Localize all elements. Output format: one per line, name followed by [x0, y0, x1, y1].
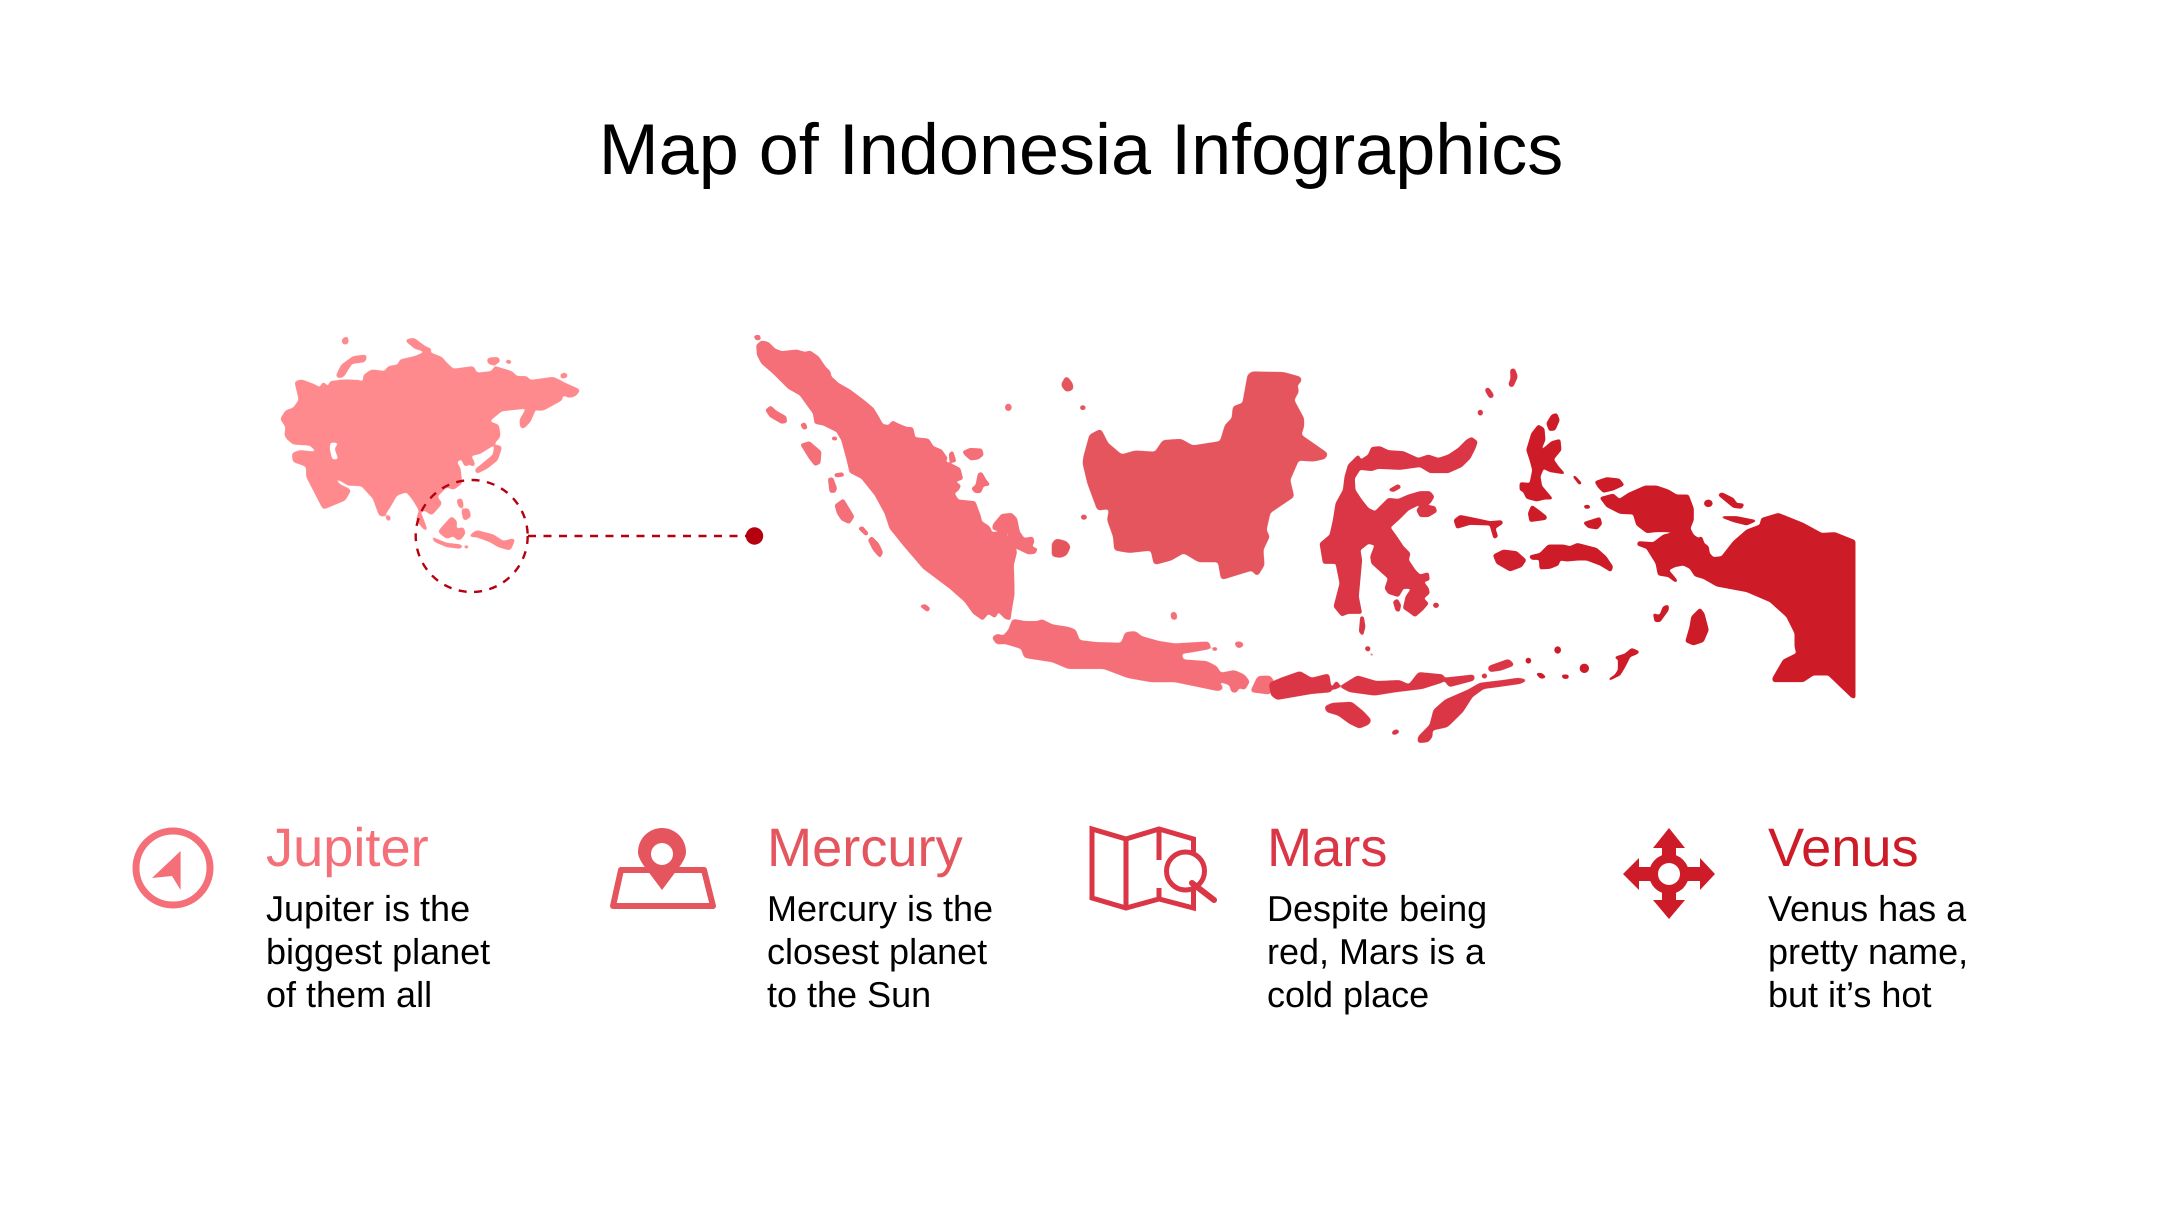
text: Venus description: pretty name,	[1768, 931, 1968, 972]
title: Map of Indonesia Infographics	[599, 110, 1563, 190]
text: Jupiter description: Jupiter is the	[266, 888, 470, 929]
map: Kalimantan region	[1052, 372, 1327, 579]
map: Lesser Sunda islands	[1269, 368, 1531, 743]
text: Mars description: cold place	[1267, 974, 1429, 1015]
panel: Mars	[1092, 818, 1487, 1015]
heading: Mercury: Mercury	[767, 818, 963, 878]
text: Mercury description: to the Sun	[767, 974, 931, 1015]
heading: Jupiter: Jupiter	[266, 818, 429, 878]
text: Venus description: but it’s hot	[1768, 974, 1931, 1015]
panel: Mercury	[613, 818, 993, 1015]
heading: Mars: Mars	[1267, 818, 1387, 878]
callout: dashed circle and leader line	[416, 480, 763, 592]
text: Mercury description: Mercury is the	[767, 888, 993, 929]
text: Jupiter description: biggest planet	[266, 931, 490, 972]
map: Sulawesi	[1320, 410, 1483, 636]
map: Asia locator	[281, 336, 580, 550]
icon: four-way arrows	[1623, 828, 1715, 919]
panel: Venus	[1623, 818, 1968, 1015]
map: central Maluku islands	[1454, 515, 1526, 571]
text: Mars description: Despite being	[1267, 888, 1487, 929]
text: Venus description: Venus has a	[1768, 888, 1967, 929]
icon: map pin	[613, 828, 713, 906]
map: Java and Bali	[992, 612, 1274, 694]
map: Sumatra	[754, 335, 1037, 620]
heading: Venus: Venus	[1768, 818, 1919, 878]
text: Mercury description: closest planet	[767, 931, 987, 972]
map: Papua and eastern Maluku	[1520, 413, 1855, 698]
icon: folded map with magnifier	[1092, 829, 1214, 908]
text: Jupiter description: of them all	[266, 974, 432, 1015]
panel: Jupiter	[136, 818, 490, 1015]
text: Mars description: red, Mars is a	[1267, 931, 1486, 972]
icon: compass circle	[136, 831, 210, 905]
